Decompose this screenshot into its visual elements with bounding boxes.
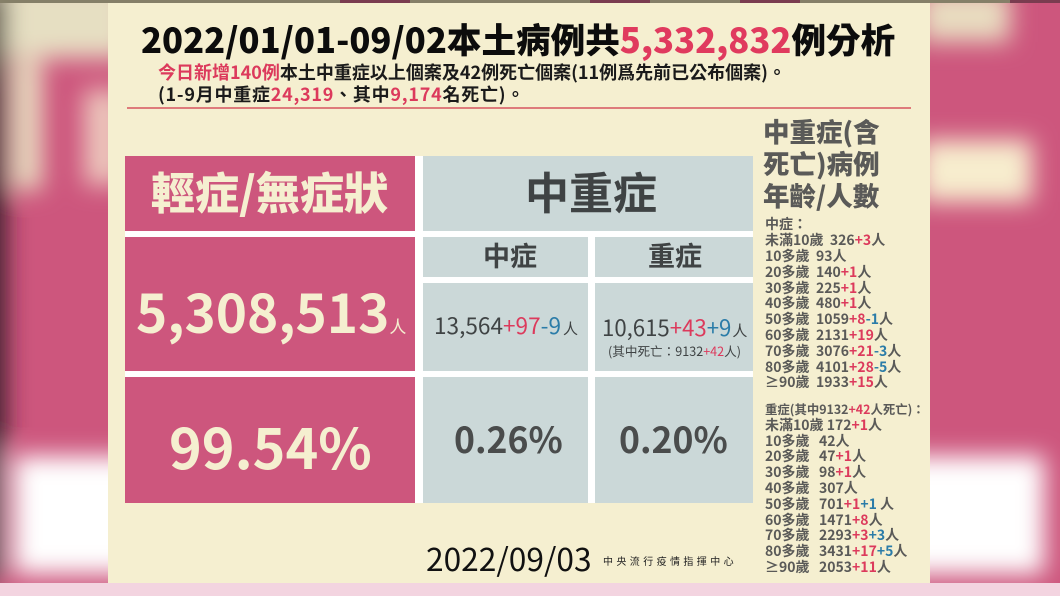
moderate by age list — [765, 214, 901, 392]
heading: moderate and severe — [423, 156, 753, 231]
subtitle line 2: (1-9月中重症24,319、其中9,174名死亡)。 — [158, 81, 525, 107]
severe by age list: 60多歲 — [765, 510, 810, 530]
severe by age list: 10多歲 — [765, 431, 810, 451]
severe by age list: 98+1人 — [819, 462, 866, 482]
heading: mild or asymptomatic — [125, 156, 415, 231]
moderate count — [423, 283, 588, 371]
moderate by age list: 93人 — [816, 246, 847, 266]
moderate by age list: 70多歲 — [765, 341, 810, 361]
severe by age list: 80多歲 — [765, 541, 810, 561]
mild percentage — [125, 377, 415, 503]
severe by age list: 30多歲 — [765, 462, 810, 482]
moderate by age list: 2131+19人 — [816, 325, 888, 345]
severe by age list: 3431+17+5人 — [819, 541, 907, 561]
divider rule — [127, 107, 911, 109]
source: CECC: 中央流行疫情指揮中心 — [603, 553, 737, 568]
severe count: 10,615+43+9人 — [602, 311, 747, 343]
heading: moderate and severe: 中重症 — [525, 158, 657, 222]
severe by age list: 70多歲 — [765, 525, 810, 545]
moderate by age list: 4101+28-5人 — [816, 357, 901, 377]
severe by age list: 未滿10歲 172+1人 — [765, 415, 882, 435]
severe by age list: 701+1+1 人 — [819, 494, 894, 514]
severe by age list: 307人 — [819, 478, 858, 498]
moderate by age list: 10多歲 — [765, 246, 810, 266]
moderate count: 13,564+97-9人 — [434, 308, 578, 341]
severe percentage: 0.20% — [619, 413, 728, 464]
severe by age list: 50多歲 — [765, 494, 810, 514]
date: 2022/09/03 — [426, 535, 592, 581]
heading: severe: 重症 — [648, 235, 702, 274]
severe by age list: 2293+3+3人 — [819, 525, 899, 545]
severe by age list: 2053+11人 — [819, 557, 891, 577]
moderate by age list: 20多歲 — [765, 262, 810, 282]
severe by age list: 重症(其中9132+42人死亡)： — [765, 400, 925, 418]
severe count — [595, 283, 753, 371]
moderate by age list: 中症： — [765, 214, 807, 234]
sidebar heading — [763, 111, 880, 214]
moderate by age list: 40多歲 — [765, 293, 810, 313]
moderate by age list: 225+1人 — [816, 278, 871, 298]
moderate by age list: 1933+15人 — [816, 372, 888, 392]
heading: severe — [595, 237, 753, 277]
moderate by age list: 60多歲 — [765, 325, 810, 345]
severe by age list: 42人 — [819, 431, 850, 451]
moderate by age list: 140+1人 — [816, 262, 871, 282]
severe by age list: 1471+8人 — [819, 510, 883, 530]
moderate percentage — [423, 377, 588, 503]
heading: moderate: 中症 — [483, 235, 537, 274]
severe by age list: 47+1人 — [819, 446, 866, 466]
severe percentage — [595, 377, 753, 503]
moderate by age list: 未滿10歲 326+3人 — [765, 230, 885, 250]
sidebar heading: 年齡/人數 — [763, 175, 879, 214]
main cream panel — [108, 3, 930, 583]
moderate percentage: 0.26% — [454, 413, 563, 464]
subtitle line 1: 今日新增140例本土中重症以上個案及42例死亡個案(11例爲先前已公布個案)。 — [158, 59, 786, 85]
moderate by age list: 30多歲 — [765, 278, 810, 298]
sidebar heading: 死亡)病例 — [763, 143, 880, 182]
mild case count: 5,308,513人 — [136, 273, 406, 349]
moderate by age list: 50多歲 — [765, 309, 810, 329]
heading: moderate — [423, 237, 588, 277]
mild case count — [125, 237, 415, 371]
moderate by age list: 480+1人 — [816, 293, 871, 313]
heading: mild or asymptomatic: 輕症/無症狀 — [151, 158, 388, 222]
sidebar heading: 中重症(含 — [763, 111, 880, 150]
severe by age list: 20多歲 — [765, 446, 810, 466]
mild percentage: 99.54% — [169, 406, 372, 486]
severe by age list: ≥90歲 — [765, 557, 810, 577]
severe by age list — [765, 400, 925, 577]
severe by age list: 40多歲 — [765, 478, 810, 498]
moderate by age list: 3076+21-3人 — [816, 341, 901, 361]
moderate by age list: 80多歲 — [765, 357, 810, 377]
severe deaths note: (其中死亡：9132+42人) — [608, 341, 741, 360]
moderate by age list: ≥90歲 — [765, 372, 810, 392]
title: 2022/01/01-09/02本土病例共5,332,832例分析 — [141, 13, 895, 63]
table panel — [125, 156, 753, 503]
moderate by age list: 1059+8-1人 — [816, 309, 893, 329]
